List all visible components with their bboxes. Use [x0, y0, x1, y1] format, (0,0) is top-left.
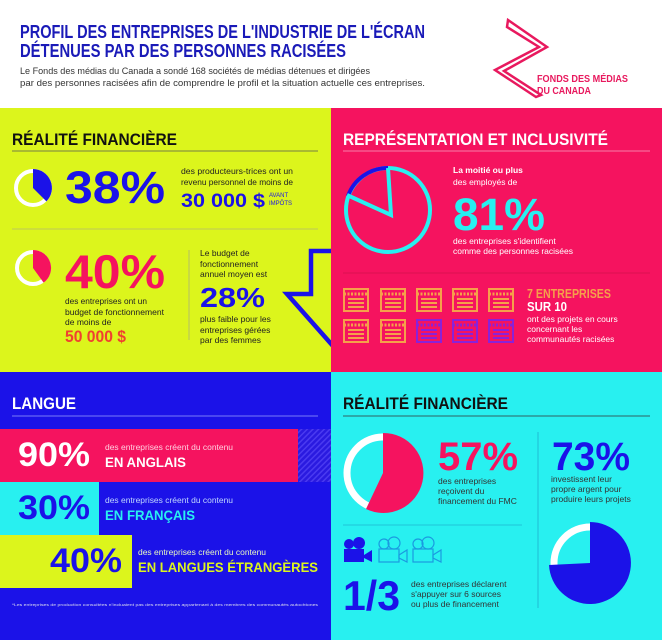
- panel: réalité financière (cyan): des entreprises: [438, 476, 496, 486]
- donut 40%: [17, 250, 51, 284]
- intro text: par des personnes racisées afin de comprendre le profil et la situation actuelle ces entreprises.: [20, 78, 425, 89]
- text 81%: 81%: [453, 189, 545, 240]
- donut 57%: [347, 433, 423, 513]
- bar 40%: [0, 535, 318, 588]
- bar 30%: 30%: [18, 489, 90, 527]
- text 28%: Le budget de: [200, 248, 250, 258]
- text 7 sur 10: SUR 10: [527, 299, 567, 314]
- text 7 sur 10: [527, 286, 618, 344]
- panel: réalité financière (cyan): financement du FMC: [438, 496, 517, 506]
- bar 30%: EN FRANÇAIS: [105, 507, 195, 523]
- title: [20, 21, 425, 61]
- panel: réalité financière (lime): [0, 108, 333, 372]
- bar 90%: EN ANGLAIS: [105, 454, 186, 470]
- text 28%: plus faible pour les: [200, 314, 271, 324]
- panel: langue: [0, 372, 331, 640]
- text 81%: des entreprises s'identifient: [453, 236, 556, 246]
- stat 73%: 73%: [552, 435, 630, 479]
- stat 1/3: 1/3: [343, 572, 400, 619]
- intro text: [20, 66, 425, 89]
- text 28%: 28%: [200, 282, 265, 313]
- bar 40%: 40%: [50, 542, 122, 580]
- heading: RÉALITÉ FINANCIÈRE: [343, 394, 508, 413]
- text 81%: comme des personnes racisées: [453, 246, 573, 256]
- panel: réalité financière (cyan): propre argent pour: [551, 484, 622, 494]
- text 81%: des employés de: [453, 177, 518, 187]
- panel: réalité financière (cyan): s'appuyer sur 6 sources: [411, 589, 501, 599]
- heading: REPRÉSENTATION ET INCLUSIVITÉ: [343, 130, 608, 149]
- text 40%: 50 000 $: [65, 327, 126, 346]
- arrow: [287, 251, 333, 346]
- text 38%: revenu personnel de moins de: [181, 177, 293, 187]
- text 38%: [181, 166, 293, 212]
- text 40%: [65, 296, 165, 346]
- text 7 sur 10: communautés racisées: [527, 334, 614, 344]
- heading: RÉALITÉ FINANCIÈRE: [12, 130, 177, 149]
- text 38%: AVANT: [269, 193, 288, 199]
- pie 73%: [549, 522, 631, 604]
- text 28%: par des femmes: [200, 335, 261, 345]
- bar 90%: [0, 429, 331, 482]
- stat 57%: 57%: [438, 435, 518, 479]
- heading: LANGUE: [12, 394, 76, 413]
- text 28%: fonctionnement: [200, 259, 259, 269]
- text 40%: de moins de: [65, 317, 112, 327]
- panel: représentation et inclusivité: [331, 108, 662, 372]
- stat 40%: 40%: [65, 245, 165, 298]
- text 38%: 30 000 $: [181, 191, 265, 212]
- text 38%: IMPÔTS: [269, 200, 292, 207]
- bar 90%: des entreprises créent du contenu: [105, 443, 233, 452]
- pie 81%: [346, 168, 430, 252]
- text 28%: annuel moyen est: [200, 269, 268, 279]
- bar 90%: 90%: [18, 436, 90, 474]
- text 81%: [453, 165, 573, 256]
- title: DÉTENUES PAR DES PERSONNES RACISÉES: [20, 40, 346, 61]
- panel: réalité financière (cyan): ou plus de financement: [411, 599, 500, 609]
- stat 38%: 38%: [65, 162, 165, 213]
- panel: réalité financière (cyan): [331, 372, 662, 640]
- footnote: *Les entreprises de production consultées n'incluaient pas des entreprises appartenant à des membres des communautés autochtones: [12, 602, 318, 607]
- title: PROFIL DES ENTREPRISES DE L'INDUSTRIE DE L'ÉCRAN: [20, 21, 425, 42]
- icons: cameras: [344, 537, 441, 562]
- text 40%: des entreprises ont un: [65, 296, 147, 306]
- logo: [495, 20, 628, 97]
- bar 30%: des entreprises créent du contenu: [105, 496, 233, 505]
- donut 38%: [16, 169, 52, 205]
- text 38%: des producteurs-trices ont un: [181, 166, 293, 176]
- logo: FONDS DES MÉDIAS: [537, 72, 628, 85]
- panel: réalité financière (cyan): produire leurs projets: [551, 494, 631, 504]
- icons: clapboards: [344, 289, 513, 342]
- text 7 sur 10: ont des projets en cours: [527, 314, 618, 324]
- logo: DU CANADA: [537, 86, 591, 97]
- text 28%: [200, 248, 271, 345]
- text 7 sur 10: 7 ENTREPRISES: [527, 286, 611, 301]
- header: [0, 0, 662, 108]
- bar 30%: [0, 482, 233, 535]
- panel: réalité financière (cyan): investissent leur: [551, 474, 612, 484]
- panel: réalité financière (cyan): des entreprises déclarent: [411, 579, 507, 589]
- text 40%: budget de fonctionnement: [65, 307, 165, 317]
- panel: réalité financière (cyan): reçoivent du: [438, 486, 485, 496]
- bar 40%: EN LANGUES ÉTRANGÈRES: [138, 559, 318, 575]
- bar 40%: des entreprises créent du contenu: [138, 548, 266, 557]
- text 7 sur 10: concernant les: [527, 324, 582, 334]
- intro text: Le Fonds des médias du Canada a sondé 168 sociétés de médias détenues et dirigées: [20, 66, 370, 77]
- text 81%: La moitié ou plus: [453, 165, 523, 175]
- text 28%: entreprises gérées: [200, 325, 270, 335]
